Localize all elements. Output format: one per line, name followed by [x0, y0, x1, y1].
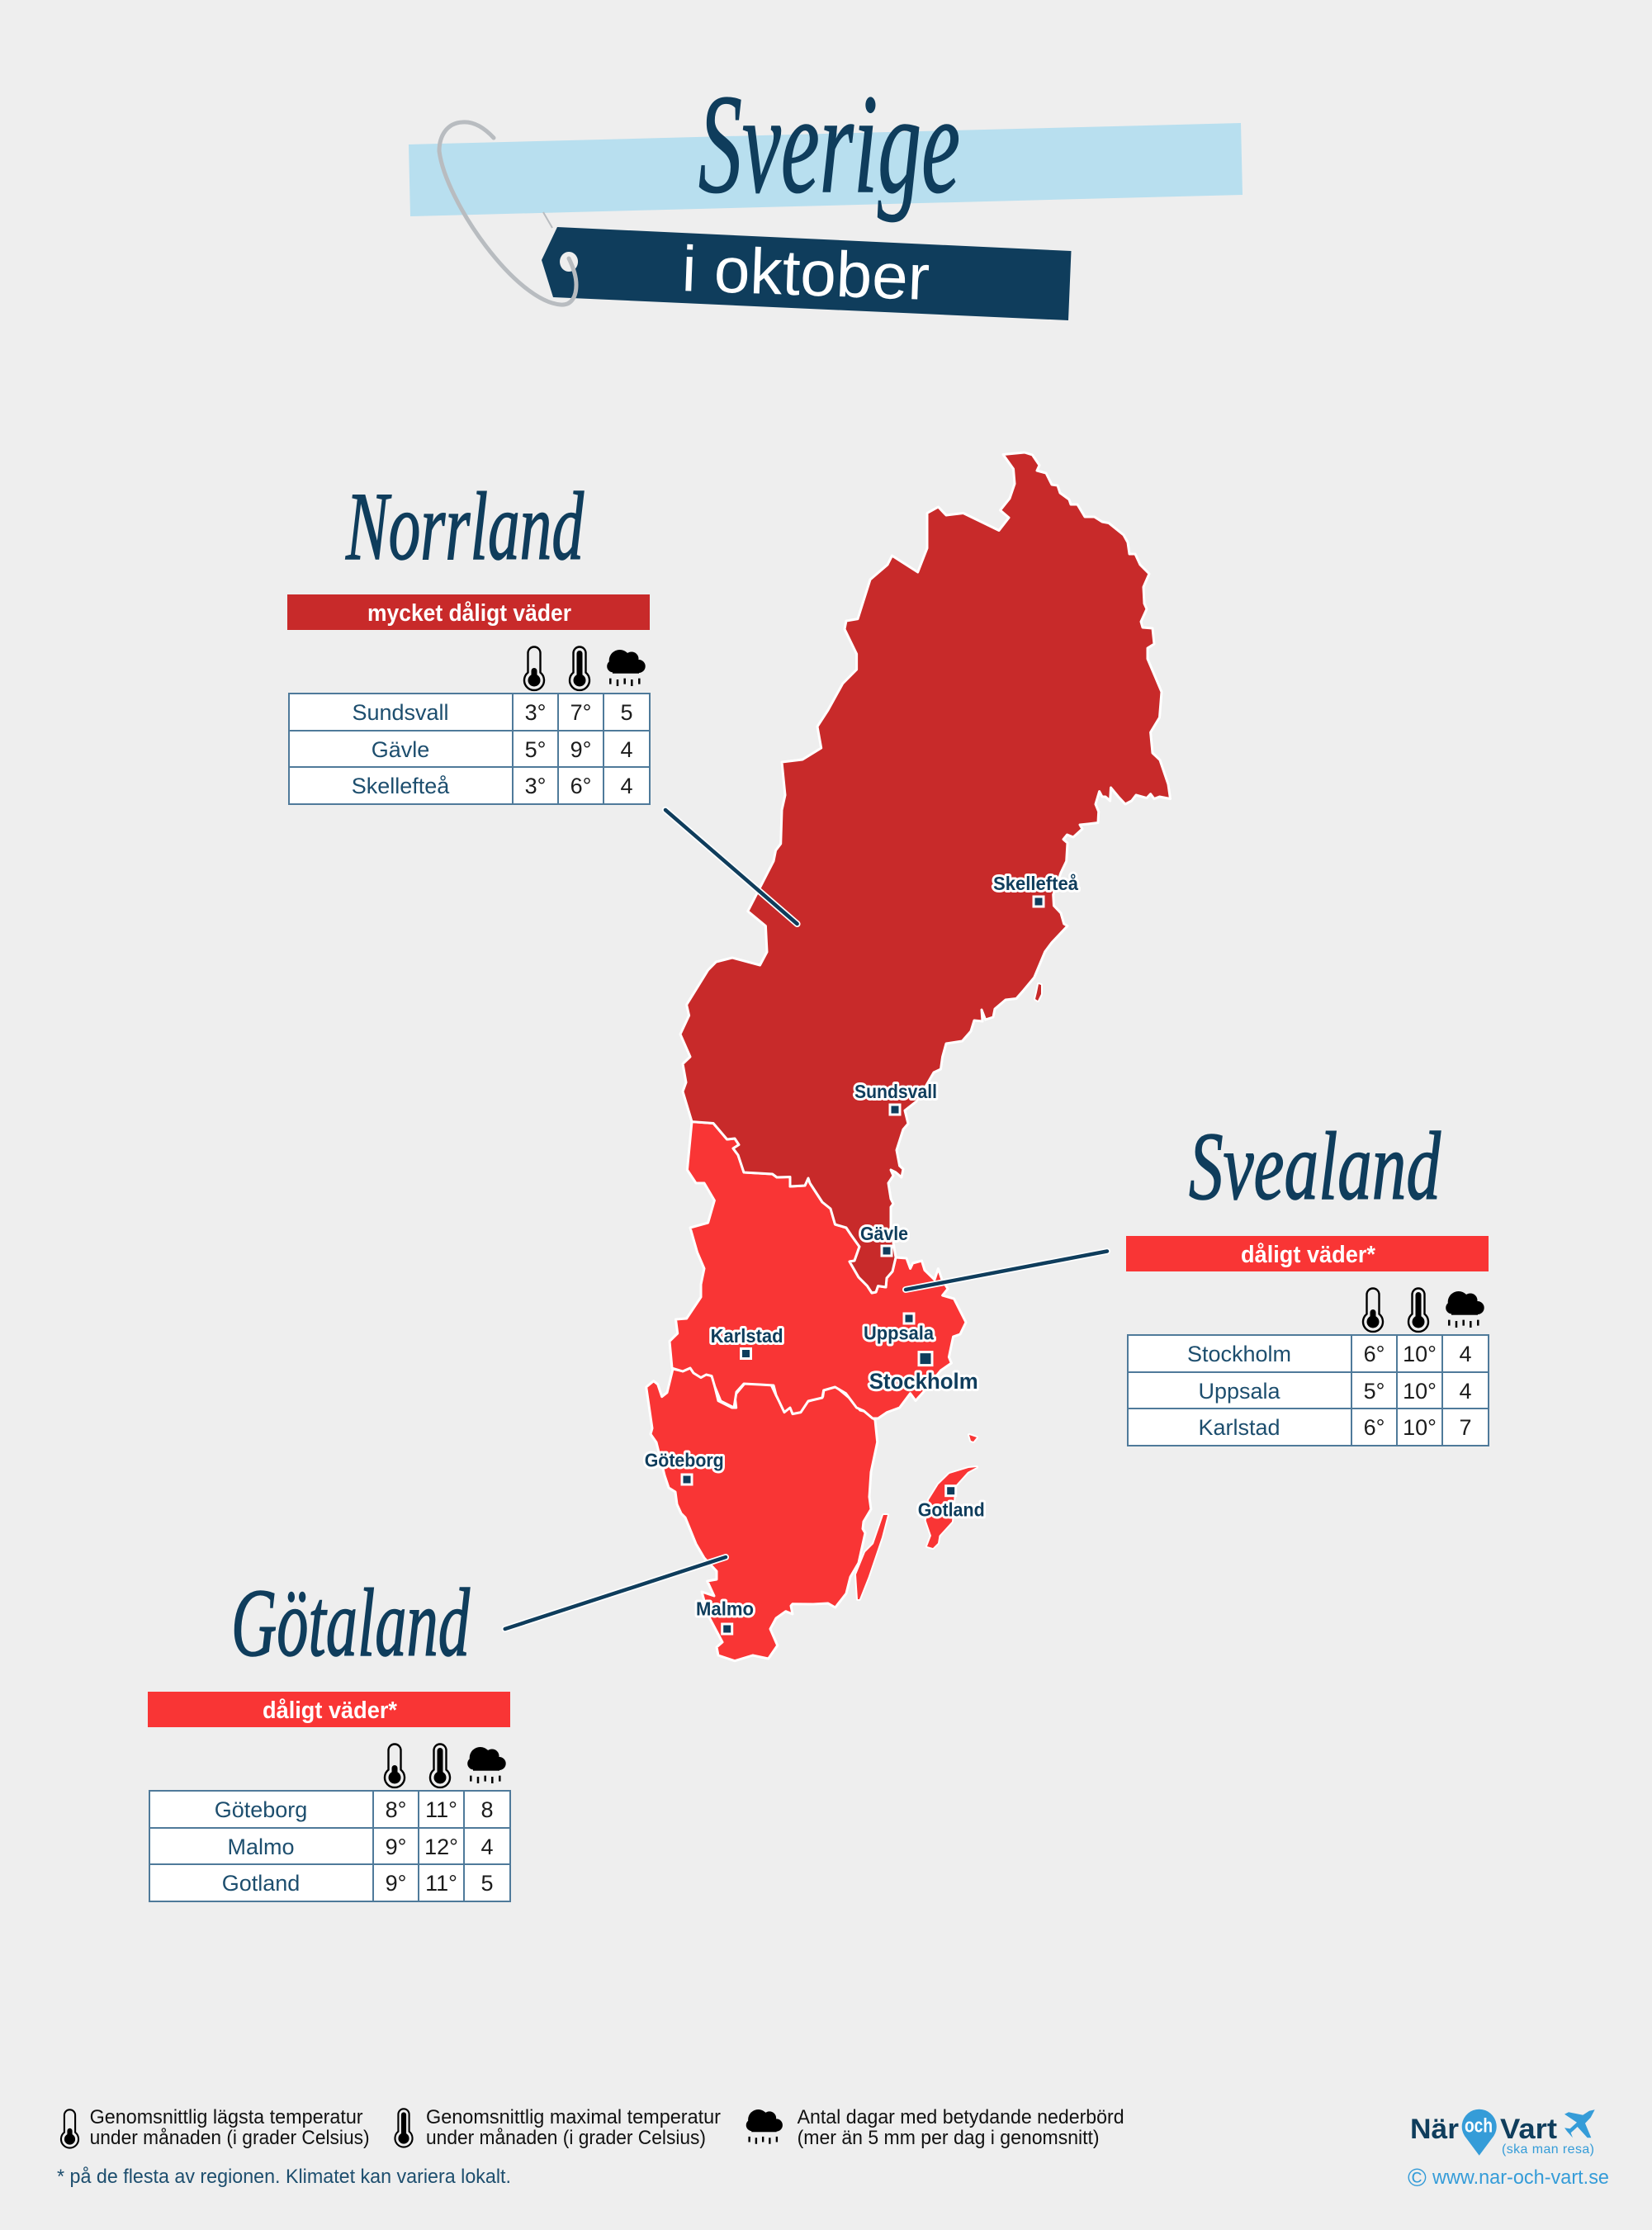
table: Svealand cities: Uppsala	[1198, 1379, 1281, 1404]
table: Norrland cities: 3°	[525, 700, 546, 725]
table: Götaland cities: 4	[480, 1835, 494, 1859]
legend: high temperature: Genomsnittlig maximal temperatur	[426, 2106, 721, 2128]
table: Götaland cities: Göteborg	[215, 1797, 307, 1822]
city: Gävle	[860, 1223, 908, 1256]
table: Norrland cities: Sundsvall	[352, 700, 449, 725]
weather bar: mycket dåligt väder	[287, 594, 650, 630]
city: Göteborg	[645, 1450, 724, 1484]
city: Göteborg: Göteborg	[645, 1450, 724, 1471]
legend: high temperature: under månaden (i grader Celsius)	[426, 2127, 706, 2149]
subtitle tag: dark blue	[542, 227, 1072, 320]
table: Götaland cities: 9°	[386, 1835, 406, 1859]
city: Gävle: Gävle	[860, 1223, 908, 1244]
connector line: Svealand	[906, 1252, 1107, 1290]
city: Gotland	[918, 1486, 985, 1521]
table: Götaland cities: 5	[480, 1871, 494, 1896]
table: Svealand cities: 10°	[1403, 1379, 1437, 1404]
footnote: * på de flesta av regionen. Klimatet kan variera lokalt.	[57, 2166, 511, 2188]
weather bar: dåligt väder: dåligt väder*	[263, 1697, 398, 1724]
table: Norrland cities: 5°	[525, 737, 546, 762]
title: Sverige: Sverige	[698, 66, 960, 223]
heading: Götaland: Götaland	[231, 1569, 471, 1677]
table: Svealand cities: 4	[1459, 1342, 1472, 1366]
weather bar: dåligt väder: dåligt väder*	[1241, 1242, 1376, 1268]
city: Karlstad: Karlstad	[711, 1325, 783, 1347]
legend: rain days	[746, 2106, 1124, 2149]
map of Sweden	[646, 452, 1171, 1661]
website url: www.nar-och-vart.se	[1432, 2166, 1609, 2189]
icon: high temperature	[430, 1744, 450, 1787]
city: Stockholm	[869, 1352, 978, 1394]
table: Norrland cities: 3°	[525, 774, 546, 798]
table: Norrland cities: 4	[620, 737, 633, 762]
table: Norrland cities: Gävle	[372, 737, 429, 762]
tag ring	[439, 122, 576, 305]
table: Norrland cities: 9°	[570, 737, 591, 762]
city: Gotland: Gotland	[918, 1499, 985, 1521]
city: Uppsala	[864, 1314, 934, 1344]
connector line: Götaland	[505, 1557, 726, 1629]
table: Norrland cities: Skellefteå	[352, 774, 450, 798]
table: Götaland cities: 8	[480, 1797, 494, 1822]
logo: När och Vart	[1408, 2109, 1609, 2192]
table: Götaland cities: Malmo	[227, 1835, 295, 1859]
table: Svealand cities: 10°	[1403, 1415, 1437, 1440]
subtitle: i oktober: i oktober	[680, 232, 931, 314]
island: Öland	[856, 1515, 888, 1599]
legend: rain days: (mer än 5 mm per dag i genomsnitt)	[798, 2127, 1100, 2149]
island: Gotland	[926, 1467, 977, 1548]
logo word: När: När	[1410, 2114, 1459, 2145]
heading: Norrland: Norrland	[345, 472, 585, 580]
panel: Svealand	[1126, 1112, 1489, 1446]
legend: low temperature	[61, 2106, 370, 2149]
panel: Götaland	[148, 1569, 510, 1901]
title tag	[409, 66, 1243, 320]
table: Götaland cities: 8°	[386, 1797, 406, 1822]
icon: low temperature	[1363, 1288, 1383, 1332]
city: Skellefteå: Skellefteå	[993, 873, 1078, 894]
city: Karlstad	[711, 1325, 783, 1359]
copyright mark: ©	[1408, 2163, 1427, 2192]
icon: rain cloud	[467, 1747, 506, 1783]
table: Svealand cities: Stockholm	[1187, 1342, 1291, 1366]
city: Malmo: Malmo	[696, 1598, 754, 1620]
region: Svealand	[670, 1122, 966, 1418]
logo word: Vart: Vart	[1500, 2114, 1557, 2145]
table: Götaland cities: 9°	[386, 1871, 406, 1896]
table: Norrland cities: 6°	[570, 774, 591, 798]
region: Norrland	[680, 452, 1171, 1293]
table: Svealand cities: 6°	[1364, 1415, 1385, 1440]
table: Götaland cities: 12°	[424, 1835, 458, 1859]
island: Gotska Sandön	[969, 1435, 977, 1442]
icon: low temperature	[524, 647, 544, 690]
table: Götaland cities	[149, 1791, 510, 1901]
legend: high temperature	[395, 2106, 721, 2149]
weather bar: mycket dåligt väder: mycket dåligt väder	[367, 600, 571, 627]
table: Götaland cities: 11°	[425, 1871, 457, 1896]
title banner: light blue	[409, 123, 1243, 216]
table: Svealand cities: 10°	[1403, 1342, 1437, 1366]
table: Götaland cities: 11°	[425, 1797, 457, 1822]
icon: rain cloud	[607, 650, 646, 686]
weather bar: dåligt väder	[1126, 1236, 1489, 1271]
table: Svealand cities	[1128, 1335, 1489, 1446]
tag string behind banner	[543, 212, 552, 228]
table: Norrland cities: 7°	[570, 700, 591, 725]
city: Stockholm: Stockholm	[869, 1369, 978, 1394]
table: Svealand cities: 4	[1459, 1379, 1472, 1404]
panel: Norrland	[287, 472, 650, 804]
table: Svealand cities: 5°	[1364, 1379, 1385, 1404]
island: Holmön	[1035, 984, 1041, 1001]
table: Norrland cities: 4	[620, 774, 633, 798]
heading: Svealand: Svealand	[1189, 1112, 1441, 1220]
icon: high temperature	[1408, 1288, 1428, 1332]
weather bar: dåligt väder	[148, 1692, 510, 1727]
icon: airplane	[1564, 2109, 1595, 2138]
connector line: Norrland	[665, 810, 798, 924]
city: Sundsvall	[854, 1081, 937, 1115]
table: Svealand cities: 6°	[1364, 1342, 1385, 1366]
legend: low temperature: under månaden (i grader Celsius)	[90, 2127, 370, 2149]
table: Svealand cities: 7	[1459, 1415, 1472, 1440]
icon: low temperature	[385, 1744, 405, 1787]
city: Uppsala: Uppsala	[864, 1323, 934, 1344]
logo tagline: (ska man resa)	[1502, 2142, 1594, 2157]
city: Skellefteå	[993, 873, 1078, 907]
city: Malmo	[696, 1598, 754, 1634]
logo pin	[1462, 2109, 1497, 2156]
legend	[57, 2106, 1124, 2188]
legend: rain days: Antal dagar med betydande nederbörd	[798, 2106, 1124, 2128]
table: Norrland cities: 5	[620, 700, 633, 725]
table: Svealand cities: Karlstad	[1198, 1415, 1280, 1440]
city: Sundsvall: Sundsvall	[854, 1081, 937, 1102]
icon: high temperature	[570, 647, 589, 690]
table: Götaland cities: Gotland	[222, 1871, 300, 1896]
table: Norrland cities	[289, 694, 650, 804]
legend: low temperature: Genomsnittlig lägsta temperatur	[90, 2106, 363, 2128]
region: Götaland	[646, 1368, 878, 1661]
icon: rain cloud	[1446, 1291, 1484, 1328]
logo word: och: och	[1465, 2115, 1493, 2138]
city labels and markers	[645, 873, 1078, 1634]
